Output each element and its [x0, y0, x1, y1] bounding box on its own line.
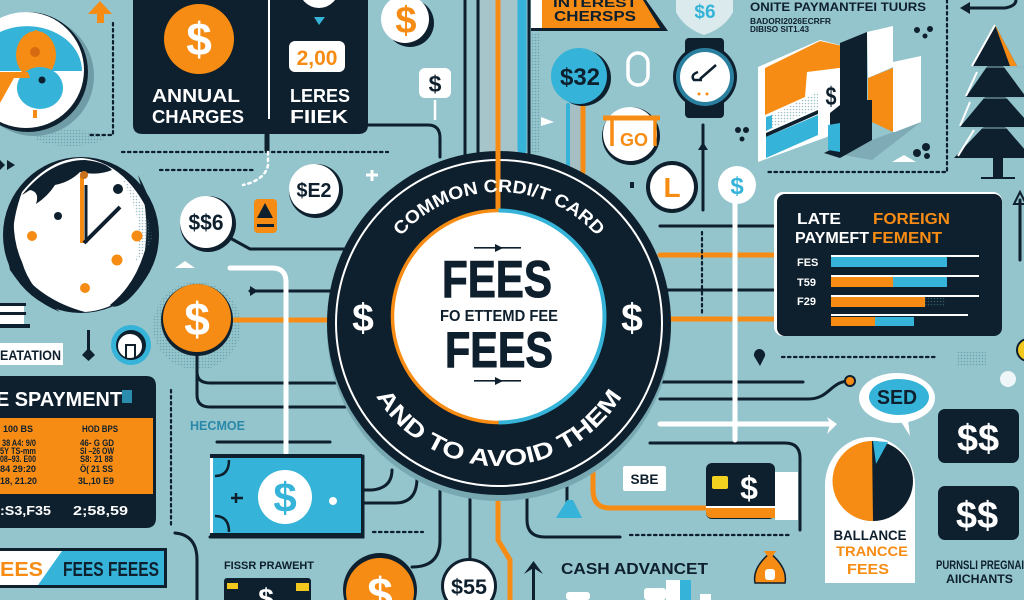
totals — [0, 503, 128, 518]
icon: dollar coin top — [381, 0, 434, 47]
icon: dotted white blob — [957, 351, 986, 366]
table — [0, 418, 153, 494]
icon: wrist watch — [673, 38, 737, 150]
label: sbe: SBE — [630, 471, 658, 487]
icon: right edge badge — [1017, 339, 1024, 361]
icon: orange dollar badge partial — [646, 161, 698, 213]
heading: payment: PAYMEFT — [795, 230, 869, 247]
table: 46- G GD — [80, 438, 114, 448]
icon: small dot marker — [630, 182, 634, 188]
icon: small white triangle — [541, 117, 554, 126]
panel: balance transfer fees: FEES — [847, 561, 889, 578]
price bubble: $E2: $E2 — [296, 180, 332, 202]
icon: right side up arrow — [1014, 192, 1024, 204]
icon: go badge: GO — [620, 130, 648, 150]
center badge: common credit card fees — [327, 151, 671, 501]
table: 5Y TS-mm — [0, 446, 36, 456]
icon: blue price badge: $32 — [560, 64, 600, 91]
icon: map pin — [754, 349, 765, 366]
price box bottom: $$ — [956, 495, 998, 537]
table: 84 29:20 — [0, 464, 36, 474]
icon: dollar tag: $ — [429, 71, 442, 97]
heading: cash advance: CASH ADVANCET — [561, 561, 708, 578]
panel: balance transfer fees — [825, 437, 915, 583]
icon: top price shield — [676, 0, 733, 35]
price bubble: $55: $55 — [451, 576, 487, 599]
price box top: $$ — [957, 418, 999, 460]
heading: fement: FEMENT — [872, 230, 942, 247]
label: eatation — [0, 343, 63, 365]
icon: credit card — [706, 463, 798, 520]
heading: foreign payment tours: DIBISO SIT1.43 — [750, 25, 810, 34]
table: SI –26 OW — [80, 446, 114, 456]
orange dollar coin left — [161, 284, 233, 356]
icon: pine tree — [954, 25, 1024, 179]
icon: top right arrow head — [960, 2, 970, 14]
icon: money bag — [755, 551, 785, 583]
icon: white dollar pin: $ — [730, 173, 744, 200]
caption: merchants: AIICHANTS — [946, 572, 1013, 586]
table: 08–93. E00 — [0, 454, 36, 464]
bar chart: F29 — [797, 296, 816, 308]
panel: late and foreign payment chart — [774, 192, 1002, 336]
heading: late fees: FIIEK — [290, 107, 348, 127]
icon: arrow head left — [250, 286, 258, 296]
curved title bottom: AND TO AVOID THEM — [376, 388, 622, 466]
table: HOD BPS — [82, 424, 118, 434]
panel: balance transfer fees: BALLANCE — [834, 527, 906, 543]
banner: interest charges: CHERSPS — [554, 8, 636, 25]
icon: small nodes — [735, 26, 933, 162]
price bubble: $56: $$6 — [188, 210, 224, 235]
table: S8: 21 88 — [80, 454, 113, 464]
center heading top: FEES — [442, 251, 552, 309]
icon: small black card — [224, 578, 311, 600]
heading: late fees: LERES — [290, 86, 350, 106]
icon: orange dollar coin — [164, 4, 234, 74]
table: 18, 21.20 — [0, 476, 37, 486]
icon: warning card — [254, 199, 277, 233]
ring dollar left: $ — [352, 297, 374, 340]
icon: go badge — [602, 107, 660, 165]
arrow: bottom up — [524, 561, 543, 600]
icon: top left face badge — [0, 12, 94, 136]
icon: blue ring — [111, 325, 151, 365]
price bubble: $55 — [441, 558, 497, 600]
icon: blue tent — [556, 500, 582, 518]
table: 38 A4: 9/0 — [2, 438, 36, 448]
heading: annual charges: ANNUAL — [152, 86, 240, 106]
banner: interest charges — [531, 0, 668, 31]
bar chart: FES — [797, 257, 818, 269]
heading: annual charges: CHARGES — [152, 107, 244, 127]
icon: orange dollar coin: $ — [186, 13, 212, 65]
icon: dollar tag — [419, 68, 451, 120]
label: eatation: EATATION — [0, 347, 61, 363]
center sub heading: FO ETTEMD FEE — [440, 308, 558, 325]
icon: down pin — [82, 330, 95, 361]
icon: white dollar pin — [718, 166, 756, 204]
icon: small up triangle — [175, 261, 195, 268]
table: 3L,10 E9 — [78, 476, 114, 486]
panel: balance transfer fees: TRANCCE — [836, 543, 908, 559]
price box top — [938, 409, 1019, 463]
blue text label: HECMOE — [190, 418, 245, 433]
pie chart — [833, 441, 913, 521]
price bubble: $56 — [180, 196, 236, 252]
icon: book stack — [0, 303, 30, 328]
banner: fees strip — [0, 548, 167, 588]
icon: top price shield: $6 — [694, 2, 716, 23]
price bubble: $E2 — [289, 164, 343, 218]
bar chart — [797, 255, 979, 326]
globe clock — [3, 157, 159, 313]
label: sbe — [623, 466, 666, 491]
icon: orange node — [845, 376, 855, 386]
center heading bottom: FEES — [445, 322, 553, 378]
panel: annual charges — [133, 0, 368, 134]
panel: late repayment table — [0, 376, 156, 528]
icon: lock outline — [628, 53, 648, 85]
value box: 2,00 — [297, 47, 337, 70]
icon: blue price badge — [551, 48, 611, 106]
illustration: folded card graphic — [758, 26, 921, 162]
orange dollar coin bottom — [343, 553, 417, 600]
panel: dollar bill — [210, 454, 362, 537]
bar chart: T59 — [797, 277, 816, 289]
heading: first payment: FISSR PRAWEHT — [224, 560, 314, 572]
price box bottom — [938, 486, 1019, 540]
icon: small white circle — [1000, 371, 1016, 387]
icon: white arrow head — [827, 417, 837, 434]
ring dollar right: $ — [621, 297, 643, 340]
illustration: folded card graphic: $ — [826, 81, 837, 111]
heading: late payment: LATE — [797, 211, 841, 228]
inner white disc — [392, 210, 604, 422]
heading: foreign payment tours: ONITE PAYMANTFEI TUURS — [750, 0, 926, 14]
banner: fees strip: FEES FEEES — [63, 559, 159, 581]
value box — [289, 41, 345, 72]
table: Ö( 21 SS — [80, 464, 113, 474]
orange dollar coin left: $ — [184, 293, 210, 345]
icon: orange dollar badge partial: L — [663, 172, 681, 203]
heading: foreign payment tours: BADORI2026ECRFR — [750, 17, 831, 26]
speech bubble: sed: SED — [877, 387, 917, 409]
totals: 2;58,59 — [73, 503, 128, 518]
clock hands — [80, 171, 120, 243]
icon: dollar coin top: $ — [395, 0, 417, 42]
heading: foreign payment tours — [750, 0, 926, 34]
icon: bottom white and blue blocks — [566, 580, 711, 600]
speech bubble: sed — [859, 373, 935, 436]
small arrows — [474, 244, 521, 385]
caption: merchants — [936, 558, 1024, 586]
banner: fees strip: EES — [0, 559, 43, 581]
icon: double chevrons — [0, 160, 15, 170]
icon: top left orange arrow — [88, 1, 112, 23]
table: 100 BS — [3, 424, 33, 434]
curved title top: COMMON CRDI/T CARD — [394, 180, 604, 234]
sparkle — [366, 170, 378, 181]
totals: :S3,F35 — [0, 503, 51, 518]
heading: foreign: FOREIGN — [873, 211, 950, 228]
icon: credit card: $ — [740, 470, 758, 506]
panel: dollar bill: $ — [273, 474, 297, 521]
